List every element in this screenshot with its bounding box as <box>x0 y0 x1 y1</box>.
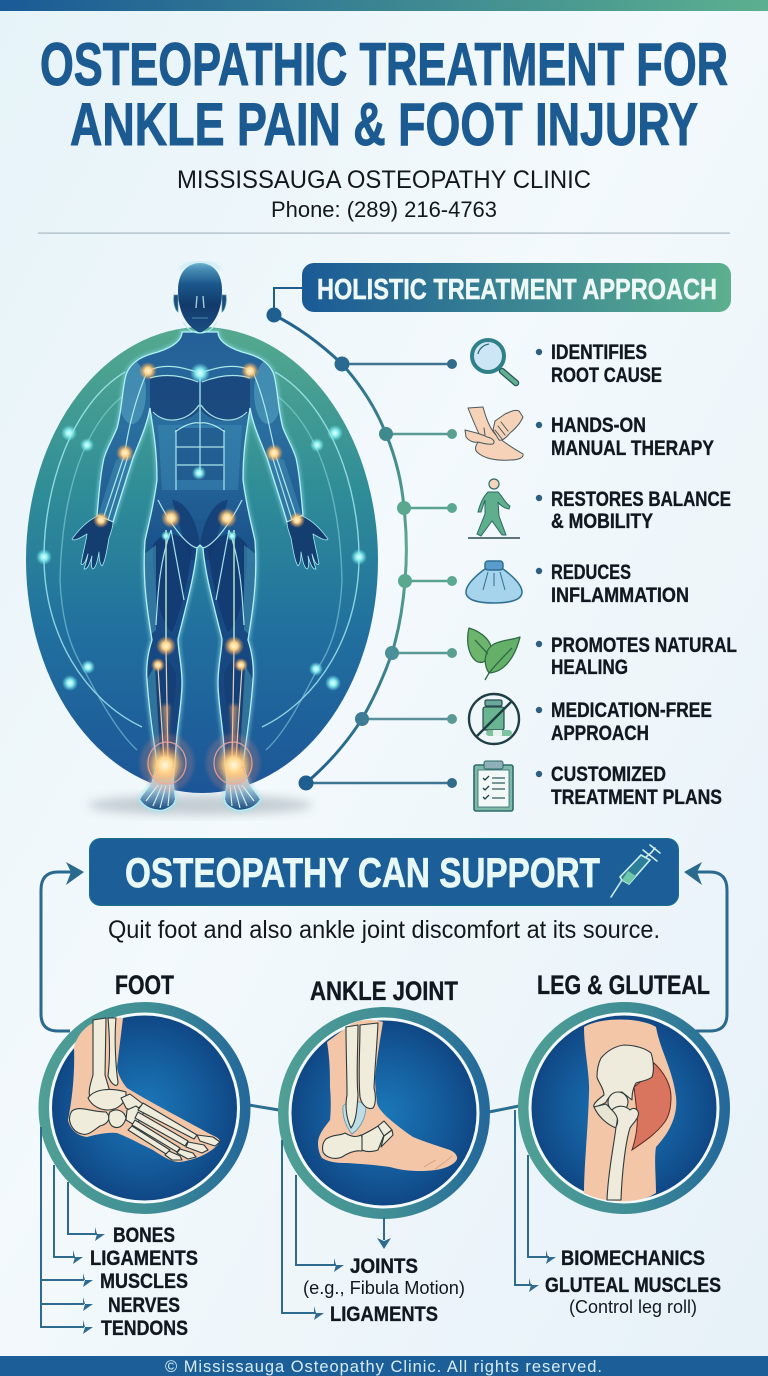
orange leg glow <box>162 705 238 765</box>
branch lines <box>306 364 452 783</box>
text: reduces inflammation: INFLAMMATION <box>551 584 689 607</box>
text: customized treatment plans <box>536 763 722 809</box>
panel: leg and gluteal illustration <box>524 1008 724 1208</box>
foot labels: BONES <box>113 1224 175 1247</box>
ankle labels: JOINTS <box>350 1255 418 1278</box>
ankle bones <box>323 1023 393 1158</box>
icon: walking figure <box>468 479 520 538</box>
icon: syringe <box>611 845 660 897</box>
foot skin <box>68 1018 220 1162</box>
text: customized treatment plans: CUSTOMIZED <box>551 763 666 786</box>
foot labels: TENDONS <box>101 1317 188 1340</box>
foot leader lines <box>41 1127 105 1334</box>
text: medication-free approach: APPROACH <box>551 722 649 745</box>
footer <box>0 1356 768 1376</box>
hands <box>72 516 328 569</box>
top colour bar <box>0 0 768 11</box>
muscle shading <box>98 360 302 760</box>
energy arcs <box>44 372 359 750</box>
panel: ankle joint illustration <box>284 1013 484 1213</box>
text: customized treatment plans: TREATMENT PLANS <box>551 786 722 809</box>
figure <box>72 262 328 810</box>
gluteal labels: (Control leg roll) <box>569 1297 697 1317</box>
icon: clipboard <box>474 761 513 811</box>
panel: holistic treatment network <box>266 288 457 790</box>
heading: osteopathy can support <box>90 838 678 906</box>
text: hands-on manual therapy: HANDS-ON <box>551 414 646 437</box>
text: promotes natural healing: HEALING <box>551 656 628 679</box>
gluteal labels: BIOMECHANICS <box>561 1247 705 1270</box>
arrow: right loop <box>684 862 727 1031</box>
ankle pain rings <box>140 734 260 792</box>
joint glow points <box>93 362 305 785</box>
icon: magnifying glass <box>472 340 516 383</box>
cyan energy dots <box>36 363 367 691</box>
ligament highlight <box>343 1102 366 1134</box>
foot labels: MUSCLES <box>100 1270 188 1293</box>
gluteal leader lines <box>515 1110 556 1292</box>
text: reduces inflammation: REDUCES <box>551 561 631 584</box>
title <box>40 31 728 158</box>
ankle labels: (e.g., Fibula Motion) <box>303 1278 465 1298</box>
nodes <box>266 308 457 790</box>
clinic name and phone: Phone: (289) 216-4763 <box>271 197 497 222</box>
text: restores balance and mobility <box>536 488 731 533</box>
pelvis and femur <box>594 1045 653 1200</box>
foot labels: NERVES <box>108 1294 180 1317</box>
gluteal muscle <box>632 1063 671 1150</box>
gluteal labels: GLUTEAL MUSCLES <box>545 1274 721 1297</box>
connectors between circles <box>249 1105 519 1112</box>
text: restores balance and mobility: & MOBILITY <box>551 510 653 533</box>
icon: ice pack <box>466 561 522 603</box>
foot labels: LIGAMENTS <box>90 1247 198 1270</box>
column headings: ANKLE JOINT <box>310 976 458 1006</box>
text: medication-free approach <box>536 699 712 745</box>
text: hands-on manual therapy <box>536 414 714 460</box>
arrow: left loop <box>41 862 84 1031</box>
icon: no medication <box>469 694 519 744</box>
text: promotes natural healing <box>536 634 737 679</box>
foot bones <box>70 1018 220 1160</box>
column headings: LEG & GLUTEAL <box>537 970 710 1000</box>
ankle skin <box>318 1020 457 1171</box>
text: identifies root cause: IDENTIFIES <box>551 341 647 364</box>
glow lines <box>103 366 297 760</box>
text: identifies root cause <box>536 341 662 387</box>
feet detail <box>140 768 260 810</box>
column headings: FOOT <box>115 970 174 1000</box>
curved connector <box>274 315 406 783</box>
body backdrop oval <box>26 327 378 793</box>
text: hands-on manual therapy: MANUAL THERAPY <box>551 437 714 460</box>
ankle labels: LIGAMENTS <box>330 1303 438 1326</box>
leg skin <box>584 1020 676 1201</box>
ankle labels <box>303 1255 465 1326</box>
clinic name and phone <box>177 166 591 222</box>
foot labels <box>90 1224 198 1340</box>
heading: osteopathy can support: OSTEOPATHY CAN SUPPORT <box>125 849 600 896</box>
icon: hands on foot <box>465 407 523 460</box>
text: restores balance and mobility: RESTORES BALANCE <box>551 488 731 511</box>
tagline: Quit foot and also ankle joint discomfort at its source. <box>108 916 660 944</box>
heading: holistic treatment approach <box>302 263 731 312</box>
icon: green leaves <box>468 628 520 680</box>
ankle leader lines <box>282 1140 391 1320</box>
text: reduces inflammation <box>536 561 689 607</box>
footer: © Mississauga Osteopathy Clinic. All rights reserved. <box>165 1358 602 1376</box>
panel: human body illustration <box>26 262 378 815</box>
column headings <box>115 970 710 1006</box>
text: identifies root cause: ROOT CAUSE <box>551 364 662 387</box>
head <box>178 263 222 333</box>
clinic name and phone: MISSISSAUGA OSTEOPATHY CLINIC <box>177 166 591 194</box>
text: medication-free approach: MEDICATION-FREE <box>551 699 712 722</box>
gluteal labels <box>545 1247 721 1317</box>
panel: foot illustration <box>44 1008 244 1208</box>
